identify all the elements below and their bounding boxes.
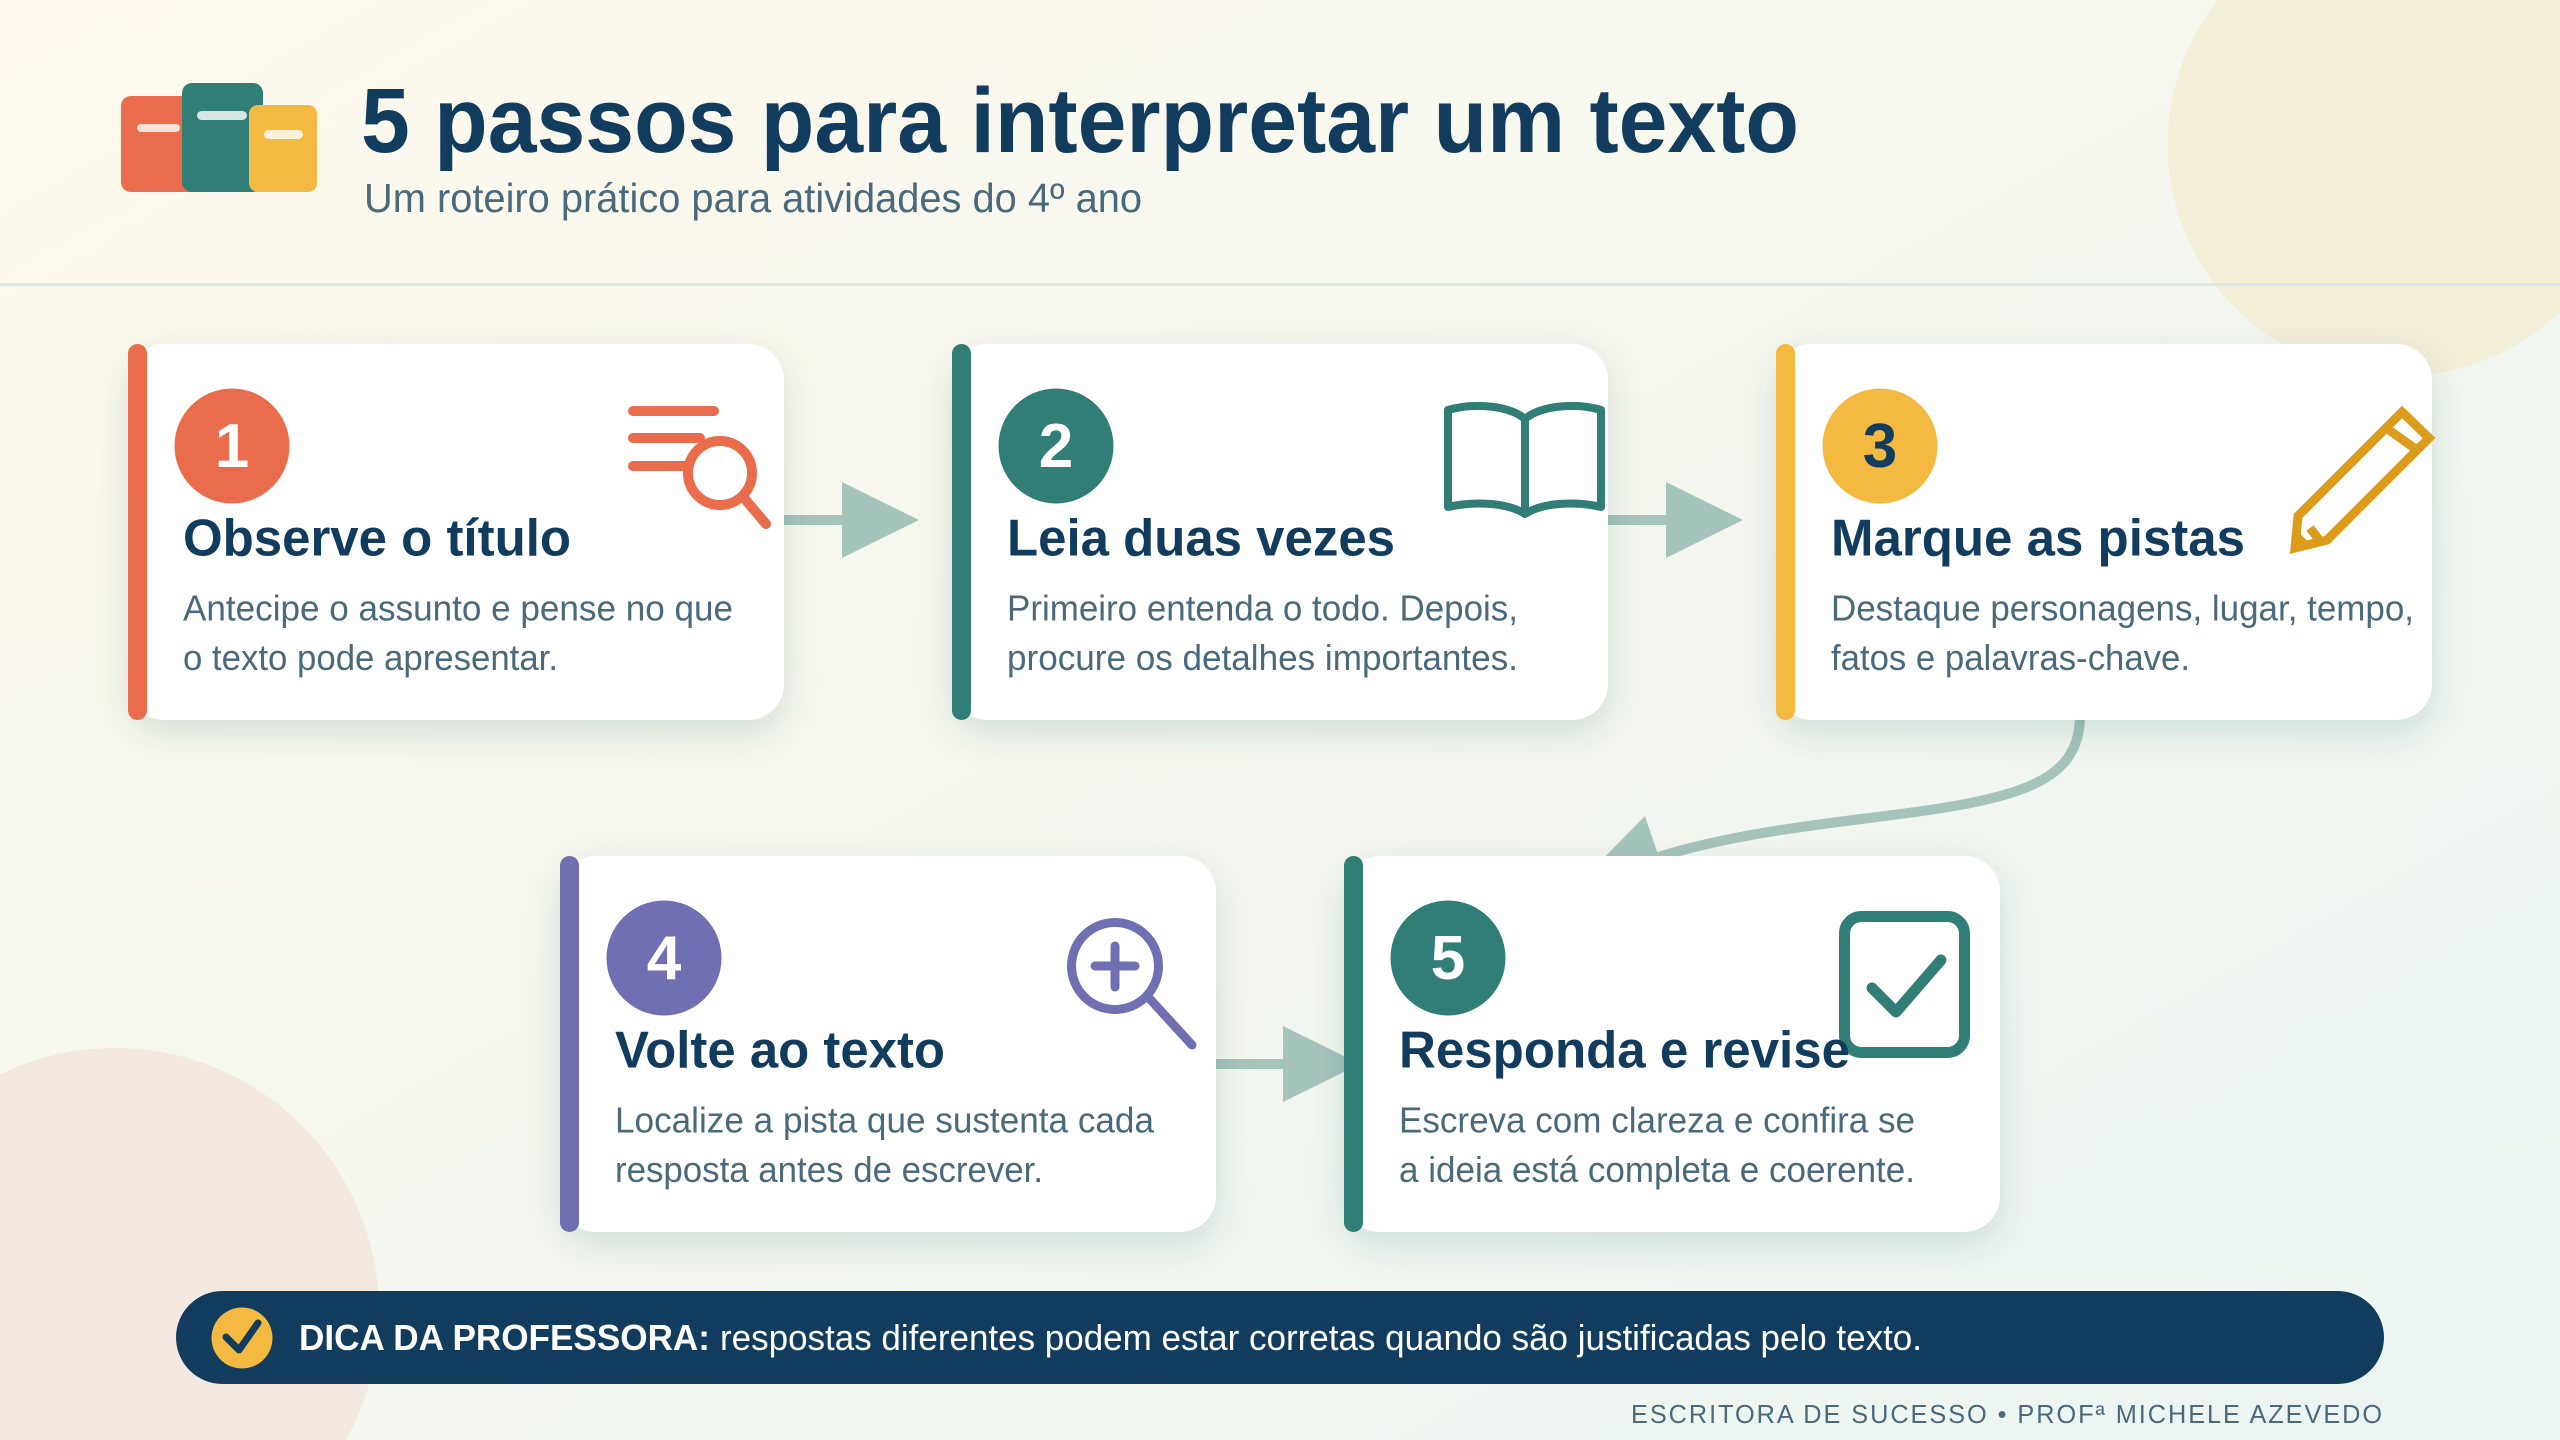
panel: step 4: [560, 856, 1216, 1232]
panel: step 2: [952, 344, 1608, 720]
callout: teacher tip: [176, 1291, 2384, 1384]
description: [1399, 1100, 1915, 1190]
description: Destaque personagens, lugar, tempo,: [1831, 588, 2414, 628]
description: o texto pode apresentar.: [183, 637, 558, 678]
icon: pencil: [2293, 412, 2429, 550]
description: resposta antes de escrever.: [615, 1149, 1043, 1190]
panel: step 3: [1776, 344, 2432, 720]
description: a ideia está completa e coerente.: [1399, 1149, 1915, 1190]
subtitle: Um roteiro prático para atividades do 4º ano: [364, 175, 1142, 221]
icon: magnifier plus: [1072, 922, 1192, 1045]
number badge 5: [1390, 900, 1506, 1016]
description: [183, 588, 733, 678]
description: [615, 1100, 1155, 1190]
title: 5 passos para interpretar um texto: [361, 70, 1799, 172]
description: [1831, 588, 2414, 678]
arrow: step 3 to 5 curved: [1590, 715, 2080, 884]
tip text: respostas diferentes podem estar corretas quando são justificadas pelo texto.: [720, 1317, 1922, 1358]
number badge 4: 4: [647, 924, 682, 993]
panel: step 1: [128, 344, 784, 720]
panel: step 5: [1344, 856, 2000, 1232]
heading: Leia duas vezes: [1007, 510, 1395, 568]
footer credit: ESCRITORA DE SUCESSO • PROFª MICHELE AZEVEDO: [1631, 1399, 2384, 1429]
number badge 5: 5: [1431, 924, 1465, 993]
arrow: step 1 to 2: [780, 482, 919, 558]
arrow: step 4 to 5: [1212, 1026, 1360, 1102]
icon: title and magnifier: [633, 411, 766, 524]
heading: Volte ao texto: [615, 1022, 945, 1080]
number badge 4: [606, 900, 722, 1016]
header icon: books: [121, 83, 317, 192]
description: fatos e palavras-chave.: [1831, 637, 2190, 678]
number badge 1: [174, 388, 290, 504]
description: Escreva com clareza e confira se: [1399, 1100, 1915, 1140]
heading: Responda e revise: [1399, 1022, 1850, 1080]
number badge 3: 3: [1863, 412, 1897, 481]
tip text: DICA DA PROFESSORA:: [299, 1317, 710, 1358]
arrow: step 2 to 3: [1604, 482, 1743, 558]
heading: Marque as pistas: [1831, 510, 2245, 568]
number badge 2: [998, 388, 1114, 504]
icon: checkbox: [1844, 916, 1964, 1052]
description: [1007, 588, 1518, 678]
icon: check badge: [212, 1308, 272, 1368]
description: procure os detalhes importantes.: [1007, 637, 1518, 678]
description: Antecipe o assunto e pense no que: [183, 588, 733, 628]
number badge 1: 1: [215, 412, 249, 481]
icon: open book: [1448, 406, 1601, 514]
number badge 2: 2: [1039, 412, 1073, 481]
number badge 3: [1822, 388, 1938, 504]
description: Primeiro entenda o todo. Depois,: [1007, 588, 1518, 628]
description: Localize a pista que sustenta cada: [615, 1100, 1155, 1140]
heading: Observe o título: [183, 510, 571, 568]
